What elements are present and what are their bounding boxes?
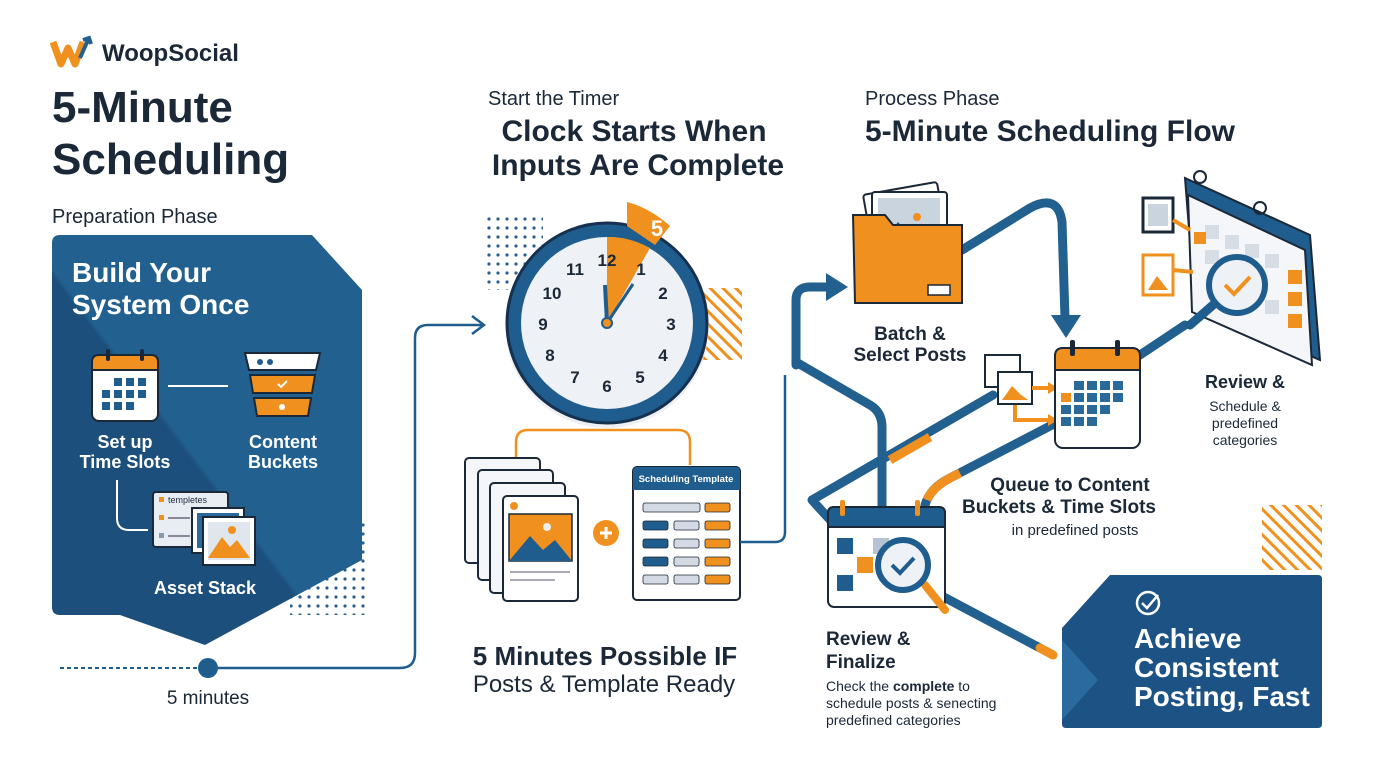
heading: clock starts	[492, 115, 784, 182]
icon: clock: 2	[658, 284, 668, 303]
label: review & finalize: Finalize	[826, 652, 896, 673]
subheading: process phase: Process Phase	[865, 88, 1000, 110]
label: queue to content buckets: Queue to Content	[990, 475, 1150, 496]
title: Scheduling	[52, 135, 289, 184]
connector: template to process	[740, 375, 785, 542]
icon: folder	[853, 182, 962, 303]
icon: queue calendar	[985, 340, 1140, 448]
title	[52, 83, 289, 184]
label: batch & select posts: Select Posts	[854, 345, 966, 366]
callout: achieve consistent posting	[1062, 505, 1322, 728]
text: 5 minutes possible: Posts & Template Ready	[473, 671, 735, 698]
timeline: 5 minutes connector: 5 minutes	[167, 688, 249, 709]
icon: clock: 4	[658, 346, 668, 365]
panel: build your system once	[52, 235, 365, 645]
label: review & schedule: categories	[1213, 432, 1277, 448]
label: review & finalize	[826, 629, 996, 728]
title: 5-Minute	[52, 83, 233, 132]
icon: clock: 8	[545, 346, 555, 365]
icon: asset stack	[153, 492, 255, 565]
icon: clock: 10	[543, 284, 561, 303]
heading: build your system once: Build Your	[72, 257, 211, 288]
icon: clock: 11	[566, 260, 584, 279]
heading: scheduling flow: 5-Minute Scheduling Flow	[865, 115, 1236, 148]
label: asset stack: Asset Stack	[154, 578, 257, 598]
card: scheduling template: Scheduling Template	[639, 474, 733, 485]
label: queue to content buckets	[962, 475, 1156, 539]
icon: plus	[593, 520, 619, 546]
text: 5 minutes possible: 5 Minutes Possible IF	[473, 641, 737, 671]
label: set up time slots	[80, 432, 170, 472]
label: batch & select posts	[854, 324, 966, 366]
icon: clock: 12	[598, 251, 616, 270]
icon: asset stack: templetes	[168, 495, 208, 505]
subheading: preparation phase: Preparation Phase	[52, 206, 218, 228]
heading: clock starts: Inputs Are Complete	[492, 149, 784, 182]
icon: clock: 6	[602, 377, 612, 396]
label: review & finalize: Review &	[826, 629, 911, 650]
label: batch & select posts: Batch &	[874, 324, 946, 345]
label: review & schedule: predefined	[1212, 415, 1278, 431]
icon: post stack	[465, 458, 578, 601]
icon: content buckets	[245, 353, 320, 416]
label: queue to content buckets: Buckets & Time Slots	[962, 497, 1156, 518]
icon: clock: 1	[636, 260, 646, 279]
connector: orange bracket	[516, 430, 690, 465]
label: review & schedule: Schedule &	[1209, 398, 1281, 414]
label: set up time slots: Time Slots	[80, 452, 170, 472]
icon: finalize calendar	[828, 500, 945, 610]
icon: clock: 9	[538, 315, 548, 334]
label: content buckets	[248, 432, 318, 472]
timeline: 5 minutes connector	[60, 316, 484, 709]
callout: achieve consistent posting: Posting, Fast	[1134, 681, 1310, 712]
icon: review calendar large	[1143, 171, 1320, 365]
label: content buckets: Buckets	[248, 452, 318, 472]
heading: build your system once: System Once	[72, 289, 249, 320]
heading: clock starts: Clock Starts When	[501, 115, 767, 148]
heading: build your system once	[72, 257, 249, 320]
icon: clock: 5	[635, 368, 645, 387]
icon: calendar time slots	[92, 349, 158, 421]
icon: clock: 7	[570, 368, 580, 387]
icon: clock: 3	[666, 315, 676, 334]
label: set up time slots: Set up	[97, 432, 153, 452]
icon: clock: 5	[651, 216, 663, 241]
callout: achieve consistent posting: Consistent	[1134, 652, 1279, 683]
flow paths	[796, 203, 1185, 648]
label: review & finalize: Check the complete to	[826, 678, 970, 694]
label: review & finalize: predefined categories	[826, 712, 961, 728]
logo: WoopSocial	[102, 40, 239, 67]
label: review & schedule	[1205, 372, 1285, 448]
text: 5 minutes possible	[473, 641, 737, 698]
card: scheduling template	[633, 467, 740, 600]
label: review & schedule: Review &	[1205, 372, 1285, 392]
label: content buckets: Content	[249, 432, 317, 452]
callout: achieve consistent posting: Achieve	[1134, 623, 1241, 654]
label: review & finalize: schedule posts & senecting	[826, 695, 996, 711]
label: queue to content buckets: in predefined posts	[1012, 522, 1138, 539]
icon: clock	[483, 202, 742, 428]
logo	[53, 38, 239, 67]
subheading: start the timer: Start the Timer	[488, 88, 619, 110]
